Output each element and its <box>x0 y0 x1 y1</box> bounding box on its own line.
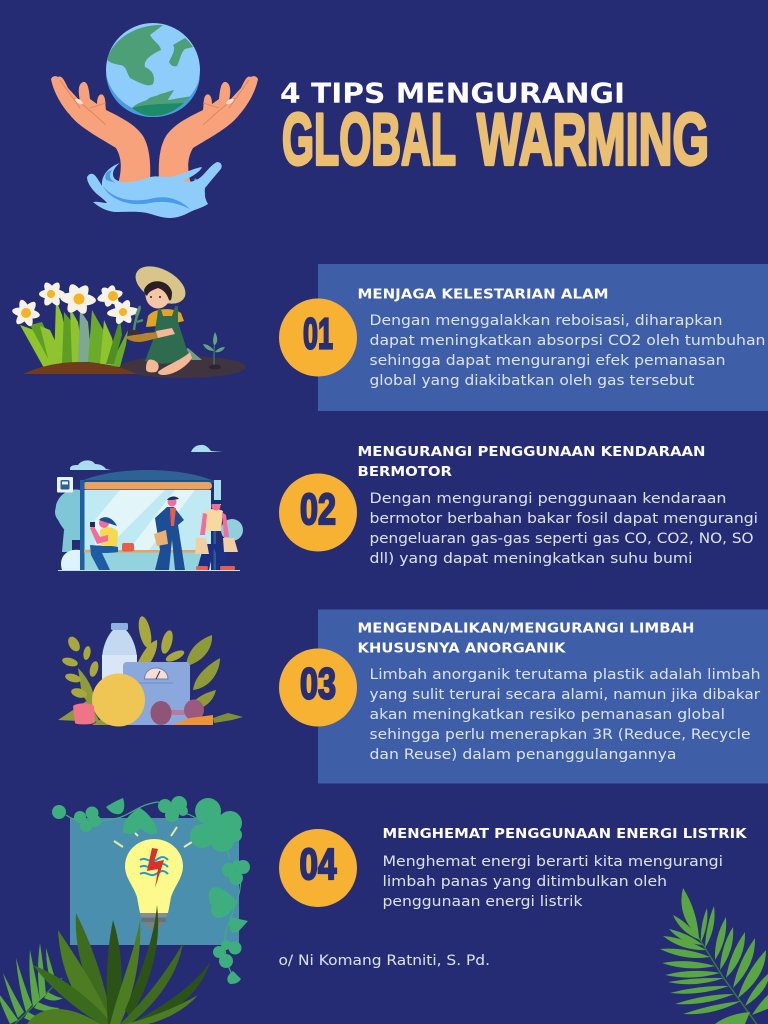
rays <box>114 827 192 847</box>
dumbbell <box>150 700 204 725</box>
author credit: o/ Ni Komang Ratniti, S. Pd. <box>278 953 490 969</box>
heading tip 2: BERMOTOR <box>358 465 452 480</box>
gardener girl <box>125 259 202 375</box>
seedling <box>203 332 225 370</box>
seated woman <box>90 517 134 570</box>
text block tip 2: Dengan mengurangi penggunaan kendaraan <box>370 491 726 507</box>
heading tip 2 <box>358 445 706 480</box>
apple <box>73 703 95 724</box>
weighing scale <box>123 662 190 725</box>
text block tip 4: limbah panas yang ditimbulkan oleh <box>382 874 667 890</box>
standing man <box>154 496 185 570</box>
circle number 01: 01 <box>303 310 333 358</box>
text block tip 4 <box>382 854 723 910</box>
right hand <box>159 76 258 184</box>
daffodil leaves <box>20 300 128 368</box>
light bulb <box>125 839 183 929</box>
water splash <box>87 162 222 218</box>
heading tip 3 <box>358 622 694 656</box>
circle number 01 <box>279 298 357 376</box>
daffodil flowers <box>11 280 139 328</box>
text block tip 3 <box>370 667 760 763</box>
heading tip 3: KHUSUSNYA ANORGANIK <box>358 642 567 656</box>
text block tip 3: dan Reuse) dalam penanggulangannya <box>370 747 676 763</box>
circle number 02 <box>279 474 357 552</box>
circle number 02: 02 <box>300 485 336 534</box>
heading tip 4: MENGHEMAT PENGGUNAAN ENERGI LISTRIK <box>382 827 748 842</box>
circle number 03: 03 <box>300 660 336 708</box>
text block tip 1 <box>370 313 766 389</box>
bus sign icon <box>57 477 73 492</box>
text block tip 2 <box>370 491 758 567</box>
carrot <box>172 713 243 725</box>
vines <box>66 802 241 975</box>
illustration: bus stop with commuters <box>55 445 243 571</box>
text block tip 1: sehingga dapat mengurangi efek pemanasan <box>370 353 726 369</box>
illustration: light bulb with clover vines <box>0 796 250 1024</box>
PLN logo <box>140 848 168 888</box>
text block tip 1: dapat meningkatkan absorpsi CO2 oleh tumbuhan <box>370 333 766 349</box>
circle number 04: 04 <box>300 840 337 889</box>
illustration: bottle, scale, ball, fruit and plants <box>58 615 243 726</box>
text block tip 2: pengeluaran gas-gas seperti gas CO, CO2, NO, SO <box>370 531 754 547</box>
exercise ball <box>92 674 145 726</box>
left fern leaf <box>0 943 63 1024</box>
text block tip 4: penggunaan energi listrik <box>382 894 583 910</box>
left hand <box>51 76 150 184</box>
title: 4 tips mengurangi: 4 TIPS MENGURANGI <box>280 76 625 110</box>
text block tip 4: Menghemat energi berarti kita mengurangi <box>382 854 723 870</box>
panel: tip 3 background <box>318 610 768 784</box>
text block tip 3: sehingga perlu menerapkan 3R (Reduce, Recycle <box>370 727 750 743</box>
heading tip 1: MENJAGA KELESTARIAN ALAM <box>358 288 608 302</box>
agave plant <box>27 905 210 1024</box>
text block tip 2: bermotor berbahan bakar fosil dapat mengurangi <box>370 511 758 527</box>
panel: tip 1 background <box>318 264 768 411</box>
icon: hands holding globe over water <box>51 23 258 218</box>
text block tip 3: Limbah anorganik terutama plastik adalah limbah <box>370 667 760 683</box>
clovers <box>52 796 250 984</box>
heading tip 2: MENGURANGI PENGGUNAAN KENDARAAN <box>358 445 706 460</box>
circle number 03 <box>279 648 357 726</box>
illustration: girl gardening with daffodils <box>11 259 246 378</box>
text block tip 3: akan meningkatkan resiko pemanasan global <box>370 707 725 723</box>
heading tip 3: MENGENDALIKAN/MENGURANGI LIMBAH <box>358 622 694 636</box>
bottle <box>102 623 137 682</box>
text block tip 1: global yang diakibatkan oleh gas tersebut <box>370 373 695 389</box>
text block tip 2: dll) yang dapat meningkatkan suhu bumi <box>370 551 692 567</box>
title: global warming: GLOBAL <box>282 100 456 180</box>
text block tip 3: yang sulit terurai secara alami, namun jika dibakar <box>370 687 760 703</box>
right fern leaf <box>660 888 768 1024</box>
standing person with bags <box>195 500 238 570</box>
text block tip 1: Dengan menggalakkan reboisasi, diharapkan <box>370 313 722 329</box>
circle number 04 <box>279 829 357 907</box>
